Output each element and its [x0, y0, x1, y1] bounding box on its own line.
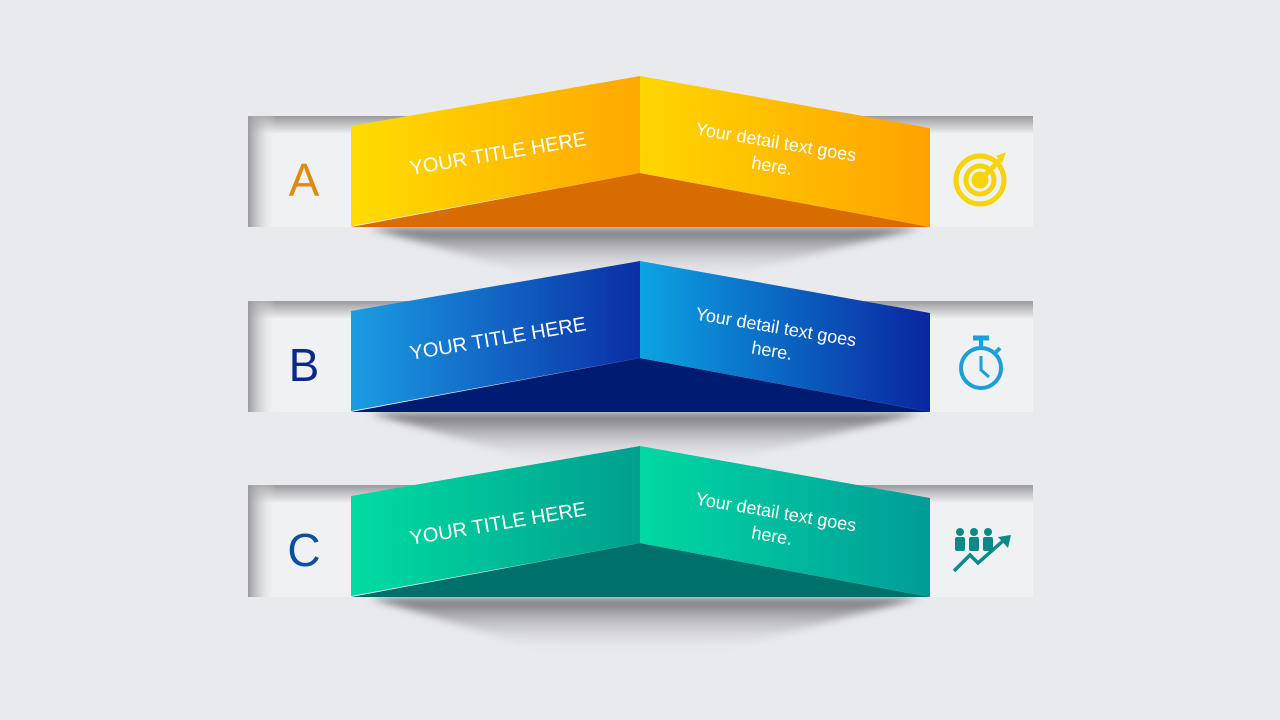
icon: people growth: [954, 528, 1011, 571]
band B: YOUR TITLE HERE: [408, 313, 588, 365]
row B: [248, 261, 1033, 467]
band C: YOUR TITLE HERE: [408, 498, 588, 550]
letter C: C: [287, 524, 321, 576]
row C: [248, 446, 1033, 655]
band B: [351, 261, 930, 412]
band A: YOUR TITLE HERE: [408, 128, 588, 180]
letter A: A: [289, 154, 320, 206]
band A: Your detail text goes: [694, 119, 858, 165]
band C: here.: [750, 522, 794, 549]
icon: target: [956, 152, 1006, 204]
icon: stopwatch: [961, 338, 1001, 388]
letter B: B: [289, 339, 319, 391]
band B: Your detail text goes: [694, 304, 858, 350]
band C: [351, 446, 930, 597]
band C: Your detail text goes: [694, 489, 858, 535]
band B: here.: [750, 337, 794, 364]
band A: [351, 76, 930, 227]
band A: here.: [750, 152, 794, 179]
row A: [248, 76, 1033, 282]
